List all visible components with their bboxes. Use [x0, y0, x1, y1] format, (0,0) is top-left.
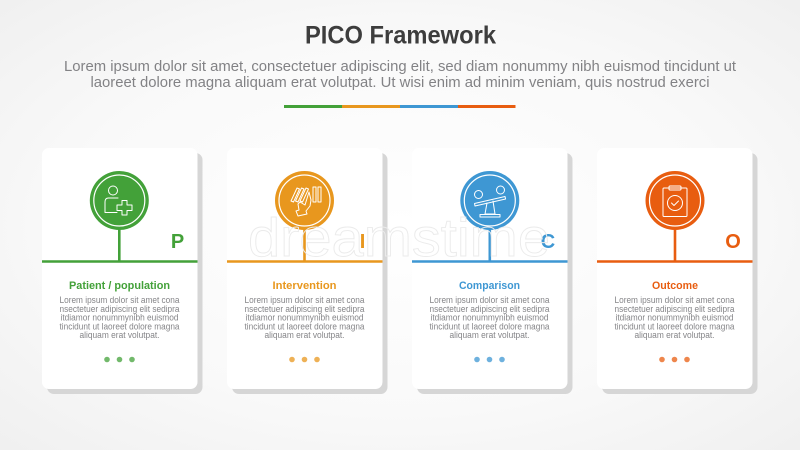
letter I: I — [360, 231, 365, 253]
letter C: C — [541, 231, 555, 253]
icon: hand pushing dominoes — [275, 171, 334, 230]
description: Lorem ipsum dolor sit amet cona — [244, 295, 365, 305]
heading: Patient / population — [69, 280, 170, 292]
icon: clipboard with check — [646, 171, 704, 230]
description: Lorem ipsum dolor sit amet cona — [614, 295, 735, 305]
connector line — [412, 228, 568, 262]
description: Lorem ipsum dolor sit amet cona — [430, 295, 550, 305]
subtitle text — [64, 58, 737, 91]
pagination dots — [474, 357, 505, 362]
heading: Comparison — [459, 280, 520, 292]
connector line — [597, 228, 752, 262]
description: aliquam erat volutpat. — [634, 330, 714, 340]
description: nsectetuer adipiscing elit sedipra — [614, 304, 735, 314]
letter P: P — [171, 231, 184, 253]
heading: Intervention — [272, 280, 337, 292]
connector line — [227, 228, 382, 262]
description: aliquam erat volutpat. — [80, 330, 160, 340]
pagination dots — [104, 357, 135, 362]
icon: balance scale A and B — [460, 171, 519, 230]
description — [60, 295, 180, 340]
description: itdiamor nonummynibh euismod — [616, 313, 734, 323]
pagination dots — [289, 357, 320, 362]
description: itdiamor nonummynibh euismod — [430, 313, 549, 323]
panel: Intervention — [227, 148, 388, 394]
description — [430, 295, 550, 340]
icon: patient with medical cross — [90, 171, 149, 230]
description — [244, 295, 365, 340]
subtitle text: laoreet dolore magna aliquam erat volutpat. Ut wisi enim ad minim veniam, quis nostrud exerci — [90, 74, 710, 91]
letter O: O — [725, 231, 741, 253]
description: nsectetuer adipiscing elit sedipra — [60, 304, 180, 314]
description: itdiamor nonummynibh euismod — [246, 313, 364, 323]
coloured title underline — [284, 105, 516, 108]
subtitle text: Lorem ipsum dolor sit amet, consectetuer adipiscing elit, sed diam nonummy nibh euismod tincidunt ut — [64, 58, 737, 75]
description — [614, 295, 735, 340]
title: PICO Framework — [305, 22, 496, 50]
description: Lorem ipsum dolor sit amet cona — [60, 295, 180, 305]
description: itdiamor nonummynibh euismod — [60, 313, 179, 323]
panel: Patient / population — [42, 148, 202, 394]
watermark: dreamstime — [248, 208, 550, 268]
description: nsectetuer adipiscing elit sedipra — [430, 304, 550, 314]
description: aliquam erat volutpat. — [264, 330, 344, 340]
connector line — [42, 228, 198, 262]
description: tincidunt ut laoreet dolore magna — [614, 322, 735, 332]
pagination dots — [659, 357, 690, 362]
description: tincidunt ut laoreet dolore magna — [60, 322, 180, 332]
panel: Outcome — [597, 148, 758, 394]
description: tincidunt ut laoreet dolore magna — [430, 322, 550, 332]
description: tincidunt ut laoreet dolore magna — [244, 322, 365, 332]
description: aliquam erat volutpat. — [450, 330, 530, 340]
heading: Outcome — [652, 280, 698, 292]
description: nsectetuer adipiscing elit sedipra — [244, 304, 365, 314]
panel: Comparison — [412, 148, 572, 394]
